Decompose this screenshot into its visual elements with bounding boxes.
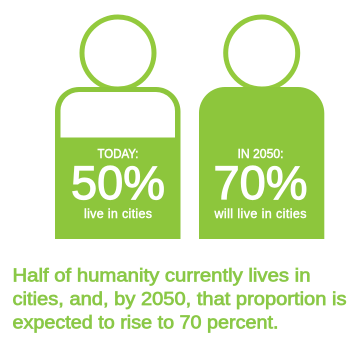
caption: expected to rise to 70 percent. [12,312,278,332]
stat: 50%: 50% [71,156,165,209]
label: today: TODAY: [98,146,138,161]
stat: 70%: 70% [214,156,308,209]
icon: head outline left [82,17,154,89]
figure: today 50% [55,17,180,239]
label: will live in cities: will live in cities [214,207,306,221]
label: in 2050: IN 2050: [238,146,284,161]
icon: head outline right [226,17,298,89]
icon: body left, half filled [55,87,180,239]
figure: 2050 70% [199,17,324,239]
label: live in cities: live in cities [84,207,152,221]
caption: Half of humanity currently lives in [12,266,310,286]
caption [12,266,346,332]
icon: body right, filled [199,87,324,239]
caption: cities, and, by 2050, that proportion is [12,289,346,309]
